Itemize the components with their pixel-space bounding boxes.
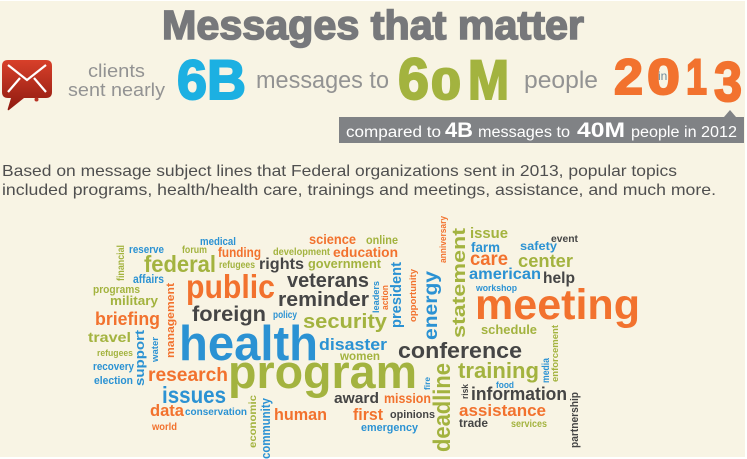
word: conference: conference: [398, 338, 522, 363]
word: care: care: [470, 249, 508, 270]
word: support (vertical): support: [132, 329, 147, 386]
word: election: election: [94, 375, 133, 387]
word: reminder: reminder: [278, 289, 369, 311]
word: funding: funding: [218, 244, 261, 260]
word: medical: medical: [200, 236, 236, 248]
callout: compared to 2012: [339, 110, 744, 143]
word: community (vertical): community: [258, 397, 273, 459]
word: rights: rights: [259, 256, 304, 273]
word: foreign: foreign: [192, 303, 266, 326]
word: disaster: disaster: [319, 335, 387, 354]
callout: compared to 2012: people in 2012: [631, 124, 737, 141]
word: services: services: [511, 419, 547, 430]
word: information: information: [471, 384, 567, 404]
word: briefing: briefing: [95, 309, 160, 329]
stat: 60M people: 0: [431, 60, 461, 109]
word: public: public: [186, 268, 275, 305]
word: action (vertical): action: [380, 285, 391, 310]
word: world: world: [151, 422, 177, 433]
word: president (vertical): president: [388, 262, 405, 328]
word: partnership (vertical): partnership: [569, 392, 581, 448]
word: meeting: meeting: [475, 281, 640, 329]
text block: intro: Based on message subject lines that Federal organizations sent in 2013, popular topics: [2, 163, 677, 180]
word: reserve: reserve: [129, 244, 164, 256]
word: trade: trade: [459, 416, 488, 430]
word: military: military: [110, 293, 159, 308]
word: issues: issues: [162, 382, 226, 408]
word: financial (vertical): financial: [116, 245, 127, 281]
text block: intro: [2, 163, 716, 199]
text: clients sent nearly: sent nearly: [68, 79, 166, 100]
word: security: security: [303, 311, 388, 333]
word: mission: mission: [384, 390, 431, 406]
word: affairs: affairs: [133, 272, 164, 286]
word: american: american: [469, 266, 541, 283]
word: award: award: [334, 390, 379, 407]
text: messages to: messages to: [256, 67, 389, 94]
callout: compared to 2012: 40M: [577, 119, 625, 142]
stat: 60M people: M: [468, 48, 509, 111]
word: media (vertical): media: [541, 358, 552, 383]
word: science: science: [309, 231, 356, 247]
word: health: health: [179, 317, 318, 371]
word: emergency: emergency: [361, 422, 419, 434]
word: issue: issue: [470, 225, 508, 242]
word: recovery: recovery: [93, 361, 135, 373]
text: people: people: [524, 67, 598, 94]
stat: 2013: 3: [714, 50, 742, 113]
word: federal: federal: [144, 251, 216, 277]
stat: 2013: 0: [647, 49, 680, 105]
word: refugees: refugees: [219, 260, 255, 271]
word: assistance: assistance: [459, 401, 546, 420]
callout: compared to 2012: compared to: [346, 124, 441, 141]
stat: 60M people: 6: [398, 47, 429, 112]
word: development: development: [273, 247, 331, 258]
word: anniversary (vertical): anniversary: [438, 216, 448, 263]
word: energy (vertical): energy: [421, 271, 442, 340]
word: deadline (vertical): deadline: [429, 363, 456, 452]
word: data: data: [150, 401, 185, 420]
word: schedule: schedule: [481, 322, 537, 337]
word: program: program: [228, 345, 417, 398]
word: leaders (vertical): leaders: [371, 281, 382, 313]
word: fire (vertical): fire: [423, 376, 432, 390]
word: veterans: veterans: [287, 270, 369, 292]
word: forum: forum: [182, 245, 207, 256]
word: workshop: workshop: [475, 283, 517, 294]
word: programs: programs: [93, 284, 140, 296]
word cloud: [88, 216, 640, 459]
word: online: online: [366, 233, 398, 247]
stat: 6B messages: 6B: [177, 48, 246, 111]
word: statement (vertical): statement: [449, 228, 469, 338]
text: clients sent nearly: [68, 60, 166, 100]
word: women: women: [339, 349, 380, 363]
stat: 2013: 2: [614, 49, 643, 105]
word: human: human: [274, 405, 327, 424]
word: refugees small: refugees: [97, 348, 133, 358]
word: research: research: [148, 365, 228, 386]
word: farm: farm: [471, 239, 500, 255]
word: government: government: [308, 256, 382, 271]
callout: compared to 2012: messages to: [478, 124, 570, 141]
icon: red envelope speech bubble: [2, 60, 52, 110]
word: safety: safety: [520, 239, 557, 253]
word: water (vertical): water: [150, 336, 160, 363]
word: economic (vertical): economic: [248, 395, 259, 448]
word: help: help: [543, 270, 575, 287]
word: opinions: opinions: [390, 409, 435, 421]
word: food: food: [496, 380, 514, 390]
word: training: training: [458, 358, 539, 383]
word: travel: travel: [88, 329, 131, 345]
text: in: in: [658, 69, 667, 83]
text: clients sent nearly: clients: [88, 60, 145, 81]
word: opportunity (vertical): opportunity: [408, 268, 419, 322]
word: education: education: [333, 244, 398, 260]
word: management (vertical): management: [165, 283, 177, 358]
word: conservation: conservation: [185, 407, 247, 418]
word: policy: policy: [273, 310, 297, 321]
word: enforcement (vertical): enforcement: [550, 325, 560, 382]
text block: intro: included programs, health/health care, trainings and meetings, assistance, and much more.: [2, 182, 716, 199]
word: event: event: [551, 234, 579, 245]
title: Messages that matter: [162, 2, 584, 48]
callout: compared to 2012: 4B: [445, 119, 473, 142]
word: risk (vertical): risk: [460, 383, 470, 399]
word: center: center: [518, 251, 573, 271]
word: first: first: [353, 405, 383, 424]
stat: 2013: 1: [686, 49, 707, 105]
